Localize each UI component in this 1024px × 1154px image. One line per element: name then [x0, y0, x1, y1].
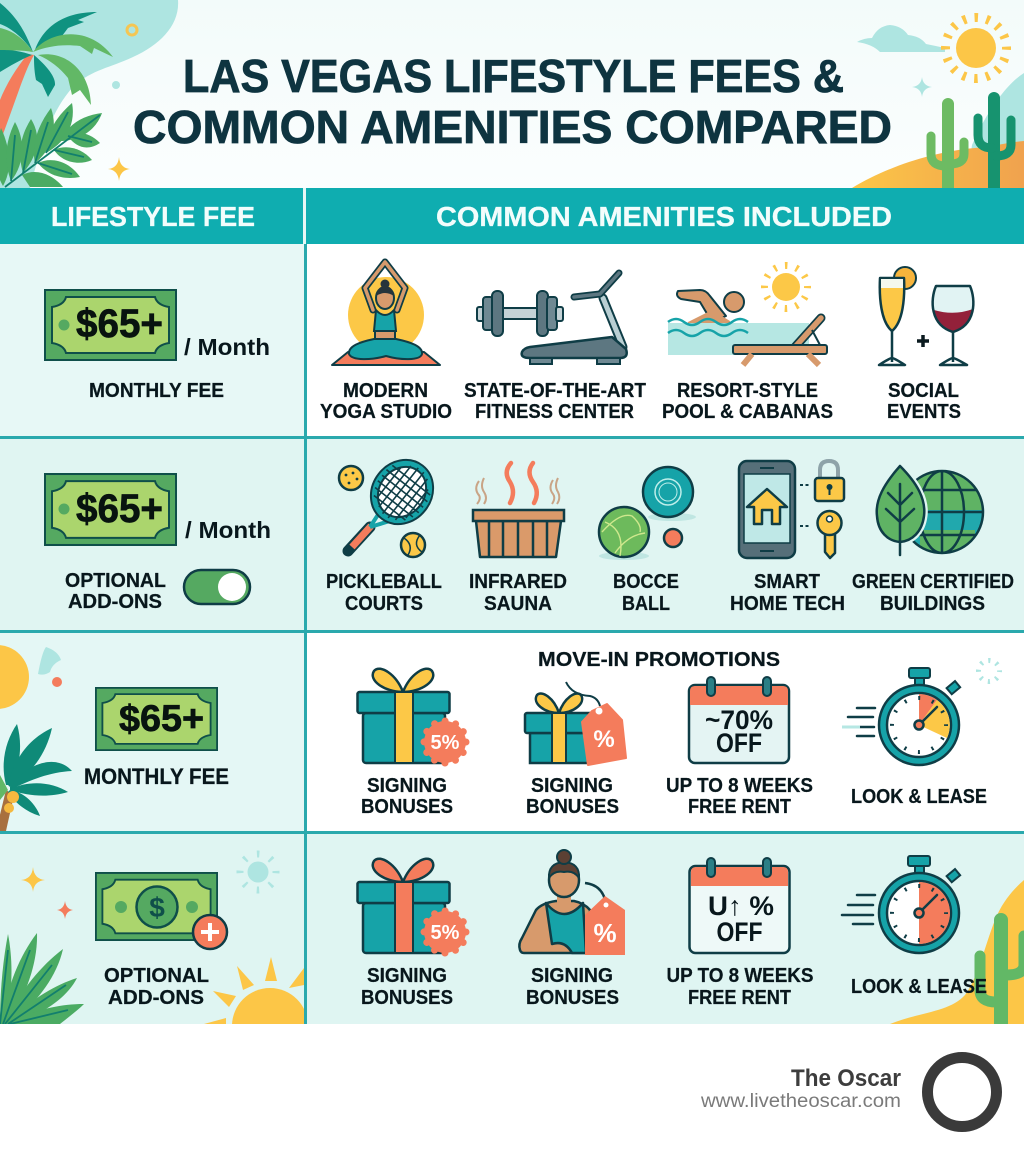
label: signing bonuses: SIGNING	[531, 774, 613, 797]
icon: pool and lounger	[668, 266, 827, 365]
row 4 right decorations	[890, 880, 1024, 1030]
icon: bocce balls	[599, 467, 696, 560]
row 3 left decorations	[0, 645, 72, 831]
label: bocce ball: BALL	[622, 592, 670, 615]
coral dot	[52, 677, 62, 687]
icon: woman with percent tag: %	[593, 918, 617, 948]
sun	[0, 645, 29, 709]
sand dune	[890, 880, 1024, 1024]
label: signing bonuses: SIGNING	[367, 964, 447, 987]
label: social events: SOCIAL	[888, 379, 959, 402]
fee amount: $65+	[119, 698, 204, 739]
label: infrared sauna	[469, 570, 567, 615]
icon: calendar off: OFF	[716, 917, 762, 947]
label: OPTIONAL	[65, 569, 166, 592]
header panel with tropical and desert scenery	[0, 0, 1024, 190]
label: bocce ball	[613, 570, 679, 615]
label: up to 8 weeks free rent: UP TO 8 WEEKS	[666, 964, 814, 987]
icon: calendar off	[690, 858, 790, 953]
label: up to 8 weeks free rent: UP TO 8 WEEKS	[666, 774, 813, 797]
icon: pickleball paddle	[339, 452, 441, 557]
label: up to 8 weeks free rent: FREE RENT	[688, 986, 791, 1009]
dot accent	[112, 81, 120, 89]
label: fitness center: FITNESS CENTER	[475, 400, 634, 423]
ring accent	[127, 25, 137, 35]
label: signing bonuses: BONUSES	[361, 986, 453, 1009]
palm	[0, 724, 72, 831]
label: signing bonuses	[526, 964, 619, 1009]
row 1 fee: monthly fee	[45, 290, 270, 402]
label: pickleball courts: PICKLEBALL	[326, 570, 442, 593]
title: COMMON AMENITIES COMPARED	[133, 101, 892, 153]
yellow sparkle	[108, 157, 130, 181]
icon: infrared sauna	[473, 463, 564, 557]
icon: gift with 5% badge	[358, 669, 466, 763]
pale sparkle	[912, 77, 932, 97]
label: signing bonuses: SIGNING	[367, 774, 447, 797]
row 4 left decorations	[0, 850, 304, 1024]
icon: drinks	[879, 267, 973, 365]
label: ADD-ONS	[68, 590, 162, 613]
label	[104, 964, 209, 1009]
fern leaf	[0, 103, 102, 187]
sparkle burst	[978, 660, 1000, 682]
label: up to 8 weeks free rent	[666, 774, 813, 818]
sun	[204, 957, 304, 1024]
heading: common amenities: COMMON AMENITIES INCLUDED	[436, 201, 892, 232]
label: ADD-ONS	[108, 986, 204, 1009]
row 3 fee: monthly fee	[84, 688, 229, 789]
per month: / Month	[184, 334, 270, 360]
icon: calendar ~70% off: ~70%	[705, 705, 773, 735]
heading: move-in promotions: MOVE-IN PROMOTIONS	[538, 648, 780, 671]
icon: calendar ~70% off	[689, 677, 789, 763]
label: signing bonuses: BONUSES	[526, 795, 619, 818]
label: look and lease: LOOK & LEASE	[851, 785, 987, 808]
icon: yoga	[332, 262, 440, 365]
coral sparkle	[57, 901, 73, 919]
label: up to 8 weeks free rent	[666, 964, 814, 1009]
label: green certified buildings	[852, 570, 1014, 615]
label: signing bonuses: BONUSES	[526, 986, 619, 1009]
label: smart home tech: HOME TECH	[730, 592, 845, 615]
cactus dark	[978, 98, 1011, 190]
icon: leaf and globe	[877, 466, 985, 555]
label: pool and cabanas: POOL & CABANAS	[662, 400, 833, 423]
dollar medallion: $	[149, 892, 165, 923]
label: signing bonuses	[361, 774, 453, 818]
pale teal blob	[0, 0, 178, 188]
label: MONTHLY FEE	[89, 379, 224, 402]
label: OPTIONAL	[104, 964, 209, 987]
bill dot	[58, 504, 70, 514]
label: infrared sauna: INFRARED	[469, 570, 567, 593]
website: www.livetheoscar.com	[700, 1091, 901, 1112]
pale sun	[240, 854, 276, 890]
label: look and lease: LOOK & LEASE	[851, 975, 987, 998]
icon: stopwatch with yellow sector	[842, 668, 960, 765]
label: modern yoga studio: MODERN	[343, 379, 428, 402]
label	[65, 569, 166, 613]
icon: woman with percent tag	[519, 850, 625, 955]
label: pickleball courts	[326, 570, 442, 615]
bill icon	[96, 873, 217, 940]
label: social events	[887, 379, 961, 423]
label: social events: EVENTS	[887, 400, 961, 423]
palm tree	[0, 3, 113, 142]
icon: calendar off: U↑ %	[708, 891, 774, 921]
toggle switch	[184, 570, 250, 604]
heading: lifestyle fee: LIFESTYLE FEE	[51, 201, 255, 232]
title: LAS VEGAS LIFESTYLE FEES &	[183, 50, 844, 102]
icon: stopwatch with coral half	[842, 856, 960, 953]
icon: gift with coral ribbon: 5%	[431, 922, 460, 944]
icon: gift with percent tag: %	[593, 726, 615, 753]
fee amount: $65+	[76, 302, 163, 346]
label: fitness center: STATE-OF-THE-ART	[464, 379, 646, 402]
label: pickleball courts: COURTS	[345, 592, 423, 615]
label: smart home tech: SMART	[754, 570, 820, 593]
label: signing bonuses	[526, 774, 619, 818]
bill icon	[45, 474, 176, 545]
label: modern yoga studio	[320, 379, 452, 423]
sand dune	[852, 141, 1024, 188]
label: pool and cabanas	[662, 379, 833, 423]
label: up to 8 weeks free rent: FREE RENT	[688, 795, 791, 818]
icon: dumbbell and treadmill	[477, 273, 627, 364]
fern	[0, 933, 84, 1024]
brand name: The Oscar	[791, 1065, 901, 1092]
icon: calendar ~70% off: OFF	[716, 728, 762, 758]
pale hill	[972, 73, 1024, 148]
cloud	[857, 25, 945, 52]
row 2 fee: optional add-ons	[45, 474, 271, 613]
label: smart home tech	[730, 570, 845, 615]
column header band	[0, 188, 1024, 244]
per month: / Month	[185, 517, 271, 543]
cactus green	[931, 104, 964, 190]
pale shape	[38, 647, 61, 675]
icon: gift with coral ribbon	[358, 859, 466, 953]
table backgrounds and grid	[0, 244, 1024, 1024]
bill icon	[45, 290, 176, 360]
bill dot	[58, 320, 70, 330]
label: fitness center	[464, 379, 646, 423]
label: signing bonuses: BONUSES	[361, 795, 453, 818]
label: pool and cabanas: RESORT-STYLE	[677, 379, 818, 402]
cactus	[980, 920, 1024, 1030]
bill icon	[96, 688, 217, 750]
icon: smart home	[739, 461, 844, 558]
title	[133, 50, 892, 153]
label: infrared sauna: SAUNA	[484, 592, 552, 615]
label: MONTHLY FEE	[84, 764, 229, 789]
label: signing bonuses: SIGNING	[531, 964, 613, 987]
label: green certified buildings: BUILDINGS	[880, 592, 985, 615]
footer brand	[700, 1058, 996, 1126]
sun	[946, 18, 1006, 78]
plus badge	[193, 915, 227, 949]
icon: gift with 5% badge: 5%	[431, 732, 460, 754]
fee amount: $65+	[76, 487, 163, 531]
icon: gift with percent tag	[525, 682, 626, 765]
row 4 fee: optional add-ons	[96, 873, 227, 1009]
label: bocce ball: BOCCE	[613, 570, 679, 593]
label: modern yoga studio: YOGA STUDIO	[320, 400, 452, 423]
label: signing bonuses	[361, 964, 453, 1009]
yellow sparkle	[21, 867, 45, 892]
logo ring	[928, 1058, 996, 1126]
